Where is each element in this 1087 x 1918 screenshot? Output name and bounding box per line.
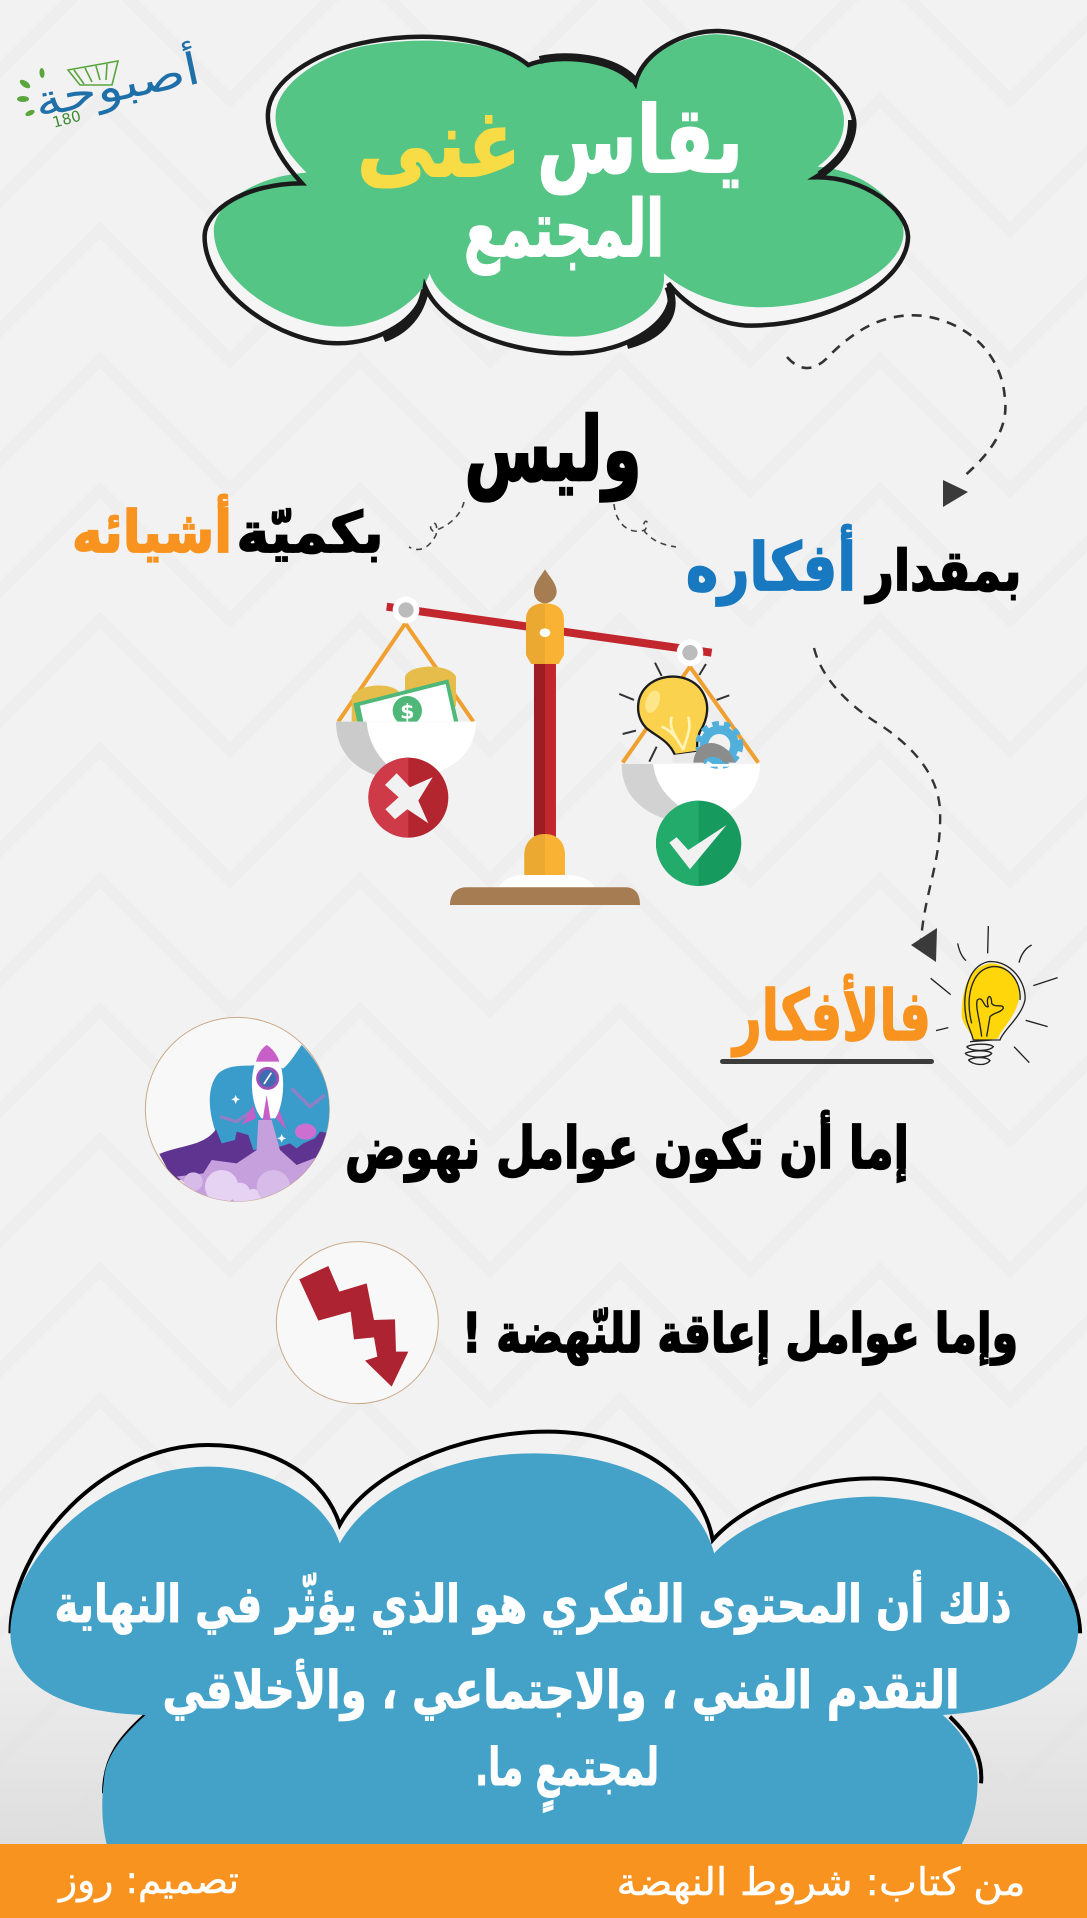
text: its things: أشيائه [72, 494, 232, 566]
icon: rocket circle [145, 1017, 330, 1206]
balance scale [336, 569, 760, 905]
beam [387, 607, 712, 653]
brass head and pole [393, 569, 703, 905]
small dashed connector left [409, 502, 464, 549]
title: second line: المجتمع [464, 185, 664, 275]
panel text: line 3: لمجتمعٍ ما. [475, 1738, 659, 1813]
left pan: $ [400, 699, 415, 723]
text: its ideas: أفكاره [686, 524, 856, 606]
text: either factors of rise: إما أن تكون عوامل نهوض [345, 1110, 909, 1183]
text: by quantity of: بكميّة [236, 501, 384, 566]
logo: 180 [51, 107, 83, 132]
panel: blue cloud [10, 1432, 1080, 1847]
footer: source: من كتاب: شروط النهضة [616, 1860, 1026, 1905]
text: by amount of: بمقدار [864, 539, 1022, 604]
icon: red cross [368, 758, 448, 838]
icon: idea bulb and gears [619, 663, 760, 767]
logo: أصبوحة [29, 39, 204, 128]
title cloud [205, 31, 908, 353]
small dashed connector right [614, 504, 676, 547]
icon: sketched light bulb [931, 926, 1058, 1064]
heading underline [720, 1059, 934, 1064]
dashed arrow: scale to ideas [814, 648, 940, 962]
footer: designer: تصميم: روز [57, 1858, 239, 1903]
footer bar [0, 1844, 1087, 1918]
heading: ideas: فالأفكار [731, 974, 931, 1057]
logo [17, 39, 204, 132]
word: and not: وليس [464, 398, 642, 502]
title: first line white word: يقاس [537, 87, 743, 194]
icon: green check [656, 801, 741, 886]
dashed arrow: cloud to ideas [787, 315, 1005, 507]
left pan [336, 623, 476, 777]
icon: falling arrow circle [276, 1242, 438, 1404]
title: highlighted word: غنى [357, 91, 521, 198]
right pan [622, 667, 760, 820]
